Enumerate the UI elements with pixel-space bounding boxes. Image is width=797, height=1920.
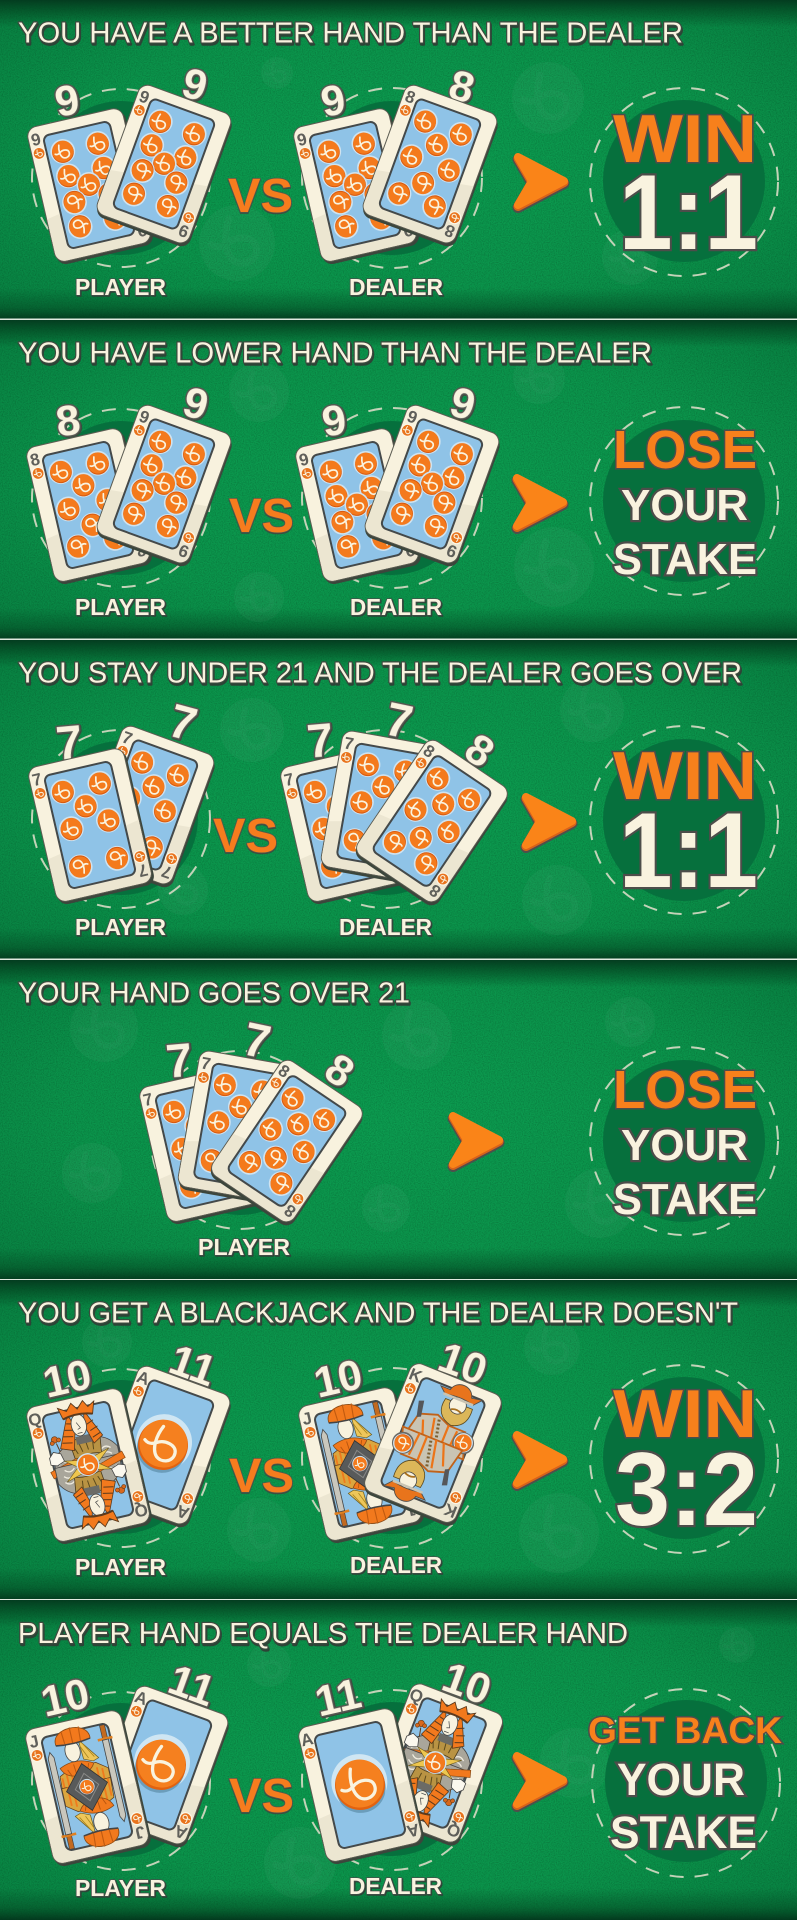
player hand — [25, 1336, 235, 1547]
result badge — [590, 726, 778, 914]
card ace: A — [405, 1820, 421, 1841]
card value 11: 11 — [163, 1336, 222, 1396]
dealer label: DEALER — [350, 1552, 442, 1578]
card ace — [90, 1683, 233, 1850]
watermark logos — [247, 1627, 755, 1899]
card 8 — [351, 736, 513, 909]
watermark logos — [199, 57, 658, 285]
card value 8: 8 — [53, 396, 83, 446]
stake: STAKE — [613, 535, 757, 584]
payout: 1:1 — [619, 152, 758, 272]
card 7 — [319, 730, 442, 886]
card 9: 9 — [444, 540, 460, 561]
table background — [0, 1600, 797, 1920]
card value 10: 10 — [39, 1350, 96, 1408]
panel: equal hands get stake back — [0, 1600, 797, 1920]
card value 10: 10 — [432, 1333, 493, 1395]
table background — [0, 320, 797, 640]
card 9: 9 — [404, 407, 420, 428]
result badge — [588, 1689, 782, 1877]
card 8: 8 — [402, 87, 418, 108]
card jack: J — [300, 1408, 314, 1429]
card 7: 7 — [141, 1089, 155, 1110]
card 8: 8 — [134, 540, 148, 561]
dealer label: DEALER — [349, 274, 443, 300]
card jack: J — [27, 1731, 41, 1752]
arrow — [517, 1756, 563, 1806]
card value 7: 7 — [54, 715, 84, 770]
player label: PLAYER — [75, 1554, 166, 1580]
card ace — [92, 1363, 235, 1530]
card king: K — [441, 1499, 460, 1522]
card jack: J — [133, 1822, 147, 1843]
payout: 1:1 — [619, 790, 758, 910]
arrow — [526, 797, 572, 848]
card 9: 9 — [136, 407, 152, 428]
card 7: 7 — [30, 769, 44, 790]
card 9: 9 — [297, 449, 311, 470]
card value 7: 7 — [164, 1033, 194, 1088]
card 8: 8 — [281, 1200, 299, 1221]
player label: PLAYER — [75, 914, 166, 940]
card jack — [297, 1385, 426, 1545]
card value 9: 9 — [317, 75, 349, 127]
card 7 — [76, 723, 219, 890]
card 7 — [27, 746, 156, 906]
panel: better hand wins 1:1 — [0, 0, 797, 320]
watermark logos — [229, 352, 594, 622]
your: YOUR — [621, 481, 748, 530]
lose: LOSE — [613, 1060, 757, 1120]
card 7: 7 — [282, 769, 296, 790]
your: YOUR — [617, 1754, 745, 1805]
card 9: 9 — [401, 220, 415, 241]
card 9: 9 — [403, 540, 417, 561]
card value 10: 10 — [37, 1669, 94, 1727]
player hand — [25, 378, 236, 587]
card 9 — [294, 426, 423, 586]
card ace: A — [299, 1729, 315, 1750]
card 9: 9 — [136, 87, 152, 108]
vs: VS — [229, 490, 294, 543]
watermark logos — [62, 994, 655, 1238]
card 9: 9 — [176, 540, 192, 561]
table background — [0, 0, 797, 320]
dealer label: DEALER — [349, 1873, 442, 1899]
card king: K — [406, 1364, 425, 1387]
card jack: J — [406, 1499, 420, 1520]
card 7: 7 — [405, 858, 417, 879]
player label: PLAYER — [75, 594, 166, 620]
vs: VS — [213, 810, 278, 863]
player hand — [27, 694, 219, 908]
vs: VS — [229, 1770, 294, 1823]
card 7 — [279, 746, 408, 906]
lose: LOSE — [613, 420, 757, 480]
player label: PLAYER — [75, 1875, 166, 1901]
panel: player busts loses stake — [0, 960, 797, 1280]
card ace — [297, 1706, 426, 1866]
win: WIN — [613, 101, 757, 177]
dashed circle — [32, 1369, 210, 1547]
dealer label: DEALER — [350, 594, 442, 620]
player label: PLAYER — [75, 274, 166, 300]
card value 7: 7 — [163, 694, 202, 751]
dashed circle — [302, 88, 482, 268]
dashed circle — [151, 1051, 329, 1229]
card queen: Q — [444, 1819, 463, 1841]
card value 11: 11 — [311, 1669, 366, 1726]
card 9 — [26, 106, 155, 266]
player label: PLAYER — [198, 1234, 290, 1260]
card ace: A — [132, 1687, 150, 1709]
card 8: 8 — [426, 880, 444, 901]
watermark logos — [82, 1317, 599, 1573]
dealer hand — [279, 692, 513, 909]
player hand — [26, 59, 236, 267]
dealer hand — [294, 378, 504, 588]
your: YOUR — [621, 1121, 748, 1170]
result badge — [590, 1047, 778, 1235]
card 9: 9 — [295, 129, 309, 150]
card 7: 7 — [262, 1178, 274, 1199]
dashed circle — [32, 730, 210, 908]
win: WIN — [613, 1376, 757, 1452]
player hand — [138, 1012, 368, 1229]
card value 9: 9 — [319, 396, 349, 446]
card 9 — [93, 402, 236, 569]
card 8: 8 — [28, 449, 42, 470]
result badge — [590, 407, 778, 595]
card value 8: 8 — [316, 1044, 363, 1097]
card 8: 8 — [420, 741, 438, 762]
card 7 — [176, 1050, 299, 1206]
card 9: 9 — [135, 220, 149, 241]
result badge — [590, 1365, 778, 1553]
arrow — [517, 478, 563, 528]
card value 8: 8 — [444, 61, 480, 113]
card queen: Q — [407, 1685, 426, 1707]
card 7: 7 — [119, 728, 135, 749]
card value 10: 10 — [310, 1350, 367, 1408]
panel: blackjack wins 3:2 — [0, 1280, 797, 1600]
dealer hand — [297, 1333, 506, 1548]
card value 9: 9 — [445, 378, 481, 430]
table background — [0, 1280, 797, 1600]
dealer label: DEALER — [339, 914, 432, 940]
heading: YOU HAVE LOWER HAND THAN THE DEALER — [18, 338, 652, 370]
card value 9: 9 — [177, 59, 213, 111]
card king — [361, 1361, 506, 1529]
card 9 — [93, 82, 236, 249]
stake: STAKE — [613, 1175, 757, 1224]
card value 8: 8 — [456, 724, 503, 777]
table background — [0, 640, 797, 960]
card 9 — [292, 106, 421, 266]
arrow — [453, 1116, 499, 1166]
card 9: 9 — [176, 220, 192, 241]
panel: dealer busts win 1:1 — [0, 640, 797, 960]
dashed circle — [302, 1690, 482, 1870]
dashed circle — [32, 1692, 210, 1870]
vs: VS — [228, 170, 293, 223]
card ace: A — [172, 1821, 190, 1843]
card 7: 7 — [159, 861, 175, 882]
heading: YOU HAVE A BETTER HAND THAN THE DEALER — [18, 18, 683, 50]
arrow — [517, 1435, 563, 1486]
card queen — [25, 1386, 154, 1546]
card value 7: 7 — [239, 1012, 275, 1069]
card 8: 8 — [275, 1061, 293, 1082]
card 7: 7 — [388, 860, 402, 881]
dashed circle — [302, 1368, 482, 1548]
vs: VS — [229, 1450, 294, 1503]
card 7: 7 — [247, 1180, 261, 1201]
card 7: 7 — [136, 860, 150, 881]
table background — [0, 960, 797, 1280]
dashed circle — [32, 409, 210, 587]
dashed circle — [302, 408, 482, 588]
heading: PLAYER HAND EQUALS THE DEALER HAND — [18, 1618, 628, 1650]
card value 7: 7 — [305, 713, 335, 768]
card 7: 7 — [343, 733, 355, 754]
panel: lower hand loses stake — [0, 320, 797, 640]
player hand — [24, 1656, 233, 1870]
card ace: A — [174, 1501, 192, 1523]
card queen: Q — [26, 1409, 44, 1431]
get back: GET BACK — [588, 1710, 782, 1751]
card value 9: 9 — [178, 378, 214, 430]
card value 10: 10 — [436, 1653, 497, 1715]
card 8 — [206, 1056, 368, 1229]
dealer hand — [292, 61, 502, 268]
arrow — [518, 157, 564, 208]
watermark logos — [158, 678, 624, 935]
card value 11: 11 — [162, 1656, 221, 1716]
heading: YOU GET A BLACKJACK AND THE DEALER DOESN'T — [18, 1298, 738, 1330]
card queen — [363, 1681, 507, 1848]
card ace: A — [134, 1367, 152, 1389]
payout: 3:2 — [615, 1432, 758, 1548]
result badge — [590, 88, 778, 276]
dashed circle — [32, 89, 210, 267]
stake: STAKE — [610, 1807, 757, 1858]
card 8: 8 — [442, 220, 458, 241]
card value 7: 7 — [381, 692, 417, 749]
dashed circle — [296, 730, 474, 908]
card 9: 9 — [29, 129, 43, 150]
win: WIN — [613, 738, 757, 814]
heading: YOU STAY UNDER 21 AND THE DEALER GOES OVER — [18, 658, 742, 690]
card 8 — [359, 82, 502, 249]
card 7 — [138, 1066, 267, 1226]
card 9 — [361, 402, 504, 569]
dealer hand — [297, 1653, 507, 1870]
heading: YOUR HAND GOES OVER 21 — [18, 978, 410, 1010]
card value 9: 9 — [51, 75, 83, 127]
card 7: 7 — [200, 1053, 212, 1074]
card 8 — [25, 426, 154, 586]
card queen: Q — [132, 1499, 150, 1521]
card jack — [24, 1708, 153, 1868]
